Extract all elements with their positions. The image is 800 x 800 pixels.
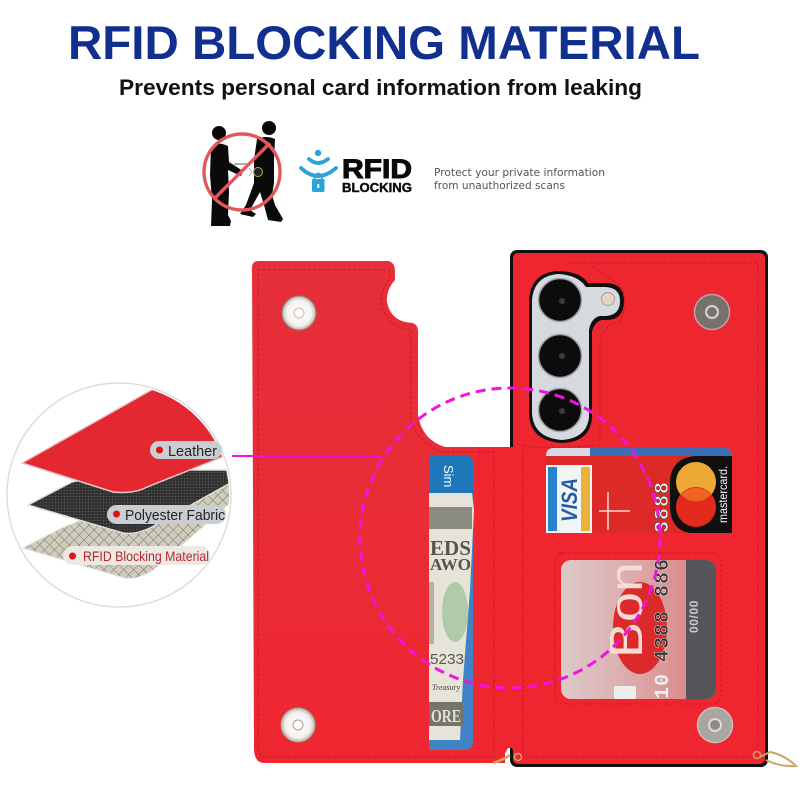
camera: lens 1 xyxy=(538,278,582,322)
icon: two walking silhouettes xyxy=(210,121,283,226)
window: card number: 4388 886 xyxy=(652,558,675,662)
layer: RFID mesh xyxy=(23,480,232,578)
banknote: Treasury xyxy=(432,683,461,692)
icon: red prohibition sign xyxy=(204,134,280,210)
label: RFID Blocking Material: RFID Blocking Material xyxy=(83,548,209,564)
layer: polyester fabric xyxy=(28,470,232,533)
case: strap ring left xyxy=(493,754,522,763)
icon: skimming prohibited xyxy=(204,121,283,226)
visa badge xyxy=(546,465,592,533)
icon: scanner signal xyxy=(234,163,262,176)
panel: ID window xyxy=(561,558,716,699)
blue card: Sim xyxy=(441,465,456,487)
card red face xyxy=(546,456,695,533)
camera: lens 3 xyxy=(538,388,582,432)
window: expiry: 00/00 xyxy=(687,600,701,633)
panel: phone case xyxy=(252,250,796,767)
subtitle: Prevents personal card information from leaking xyxy=(119,75,642,100)
window: card dark strip xyxy=(686,560,716,699)
logo word BLOCKING: BLOCKING xyxy=(342,181,412,195)
banknote: AWO xyxy=(430,555,471,574)
callout: connector line xyxy=(232,455,382,457)
case: magnetic snap top left xyxy=(282,296,316,330)
label: Leather xyxy=(150,441,222,460)
icon: RFID blocking logo xyxy=(301,150,412,195)
banknote: EDS xyxy=(430,536,471,560)
banknote xyxy=(429,493,474,740)
panel: top credit card xyxy=(546,448,732,533)
case: pocket panel xyxy=(476,447,765,763)
label: Polyester Fabric: Polyester Fabric xyxy=(125,508,225,524)
camera: black cutout xyxy=(529,271,624,443)
case: red back xyxy=(513,253,765,764)
title: RFID BLOCKING MATERIAL xyxy=(68,16,700,69)
blue card xyxy=(429,455,473,750)
visa badge: VISA xyxy=(557,478,582,522)
logo word RFID: RFID xyxy=(342,154,412,184)
card brand mark xyxy=(599,492,630,530)
mastercard badge xyxy=(670,456,732,533)
panel: cash pocket xyxy=(429,455,474,750)
protection note: Protect your private information xyxy=(434,166,605,179)
protection note: from unauthorized scans xyxy=(434,179,565,192)
case: magnetic snap top right xyxy=(694,294,730,330)
camera: lens 2 xyxy=(538,334,582,378)
case: magnetic snap bottom left xyxy=(281,708,315,742)
layer: red leather xyxy=(22,389,240,492)
panel: material layers inset xyxy=(7,383,240,607)
camera: flash xyxy=(602,292,614,306)
protection note xyxy=(434,166,605,192)
banknote: 5233 xyxy=(430,651,464,668)
banknote: ORE xyxy=(431,706,461,726)
stitching xyxy=(258,263,758,757)
case: open wallet flap xyxy=(252,261,516,763)
mastercard badge: mastercard. xyxy=(716,466,730,523)
label: RFID Blocking Material xyxy=(63,546,210,565)
case: black phone edge xyxy=(510,250,768,767)
camera: phone body xyxy=(532,274,620,440)
case: strap ring right xyxy=(754,752,796,766)
window: chip xyxy=(614,686,636,699)
icon: wifi and lock xyxy=(301,150,336,192)
label: Polyester Fabric xyxy=(107,505,226,524)
window: card number end: 10 xyxy=(652,673,675,699)
panel: camera island xyxy=(529,271,624,443)
card number: 3888 xyxy=(652,481,675,533)
case: magnetic snap bottom right xyxy=(698,708,732,742)
window: red oval xyxy=(613,582,667,674)
callout: dashed magnifier circle xyxy=(360,388,660,688)
label: Leather: Leather xyxy=(168,444,217,460)
window: Bon brand text: Bon xyxy=(600,562,652,658)
